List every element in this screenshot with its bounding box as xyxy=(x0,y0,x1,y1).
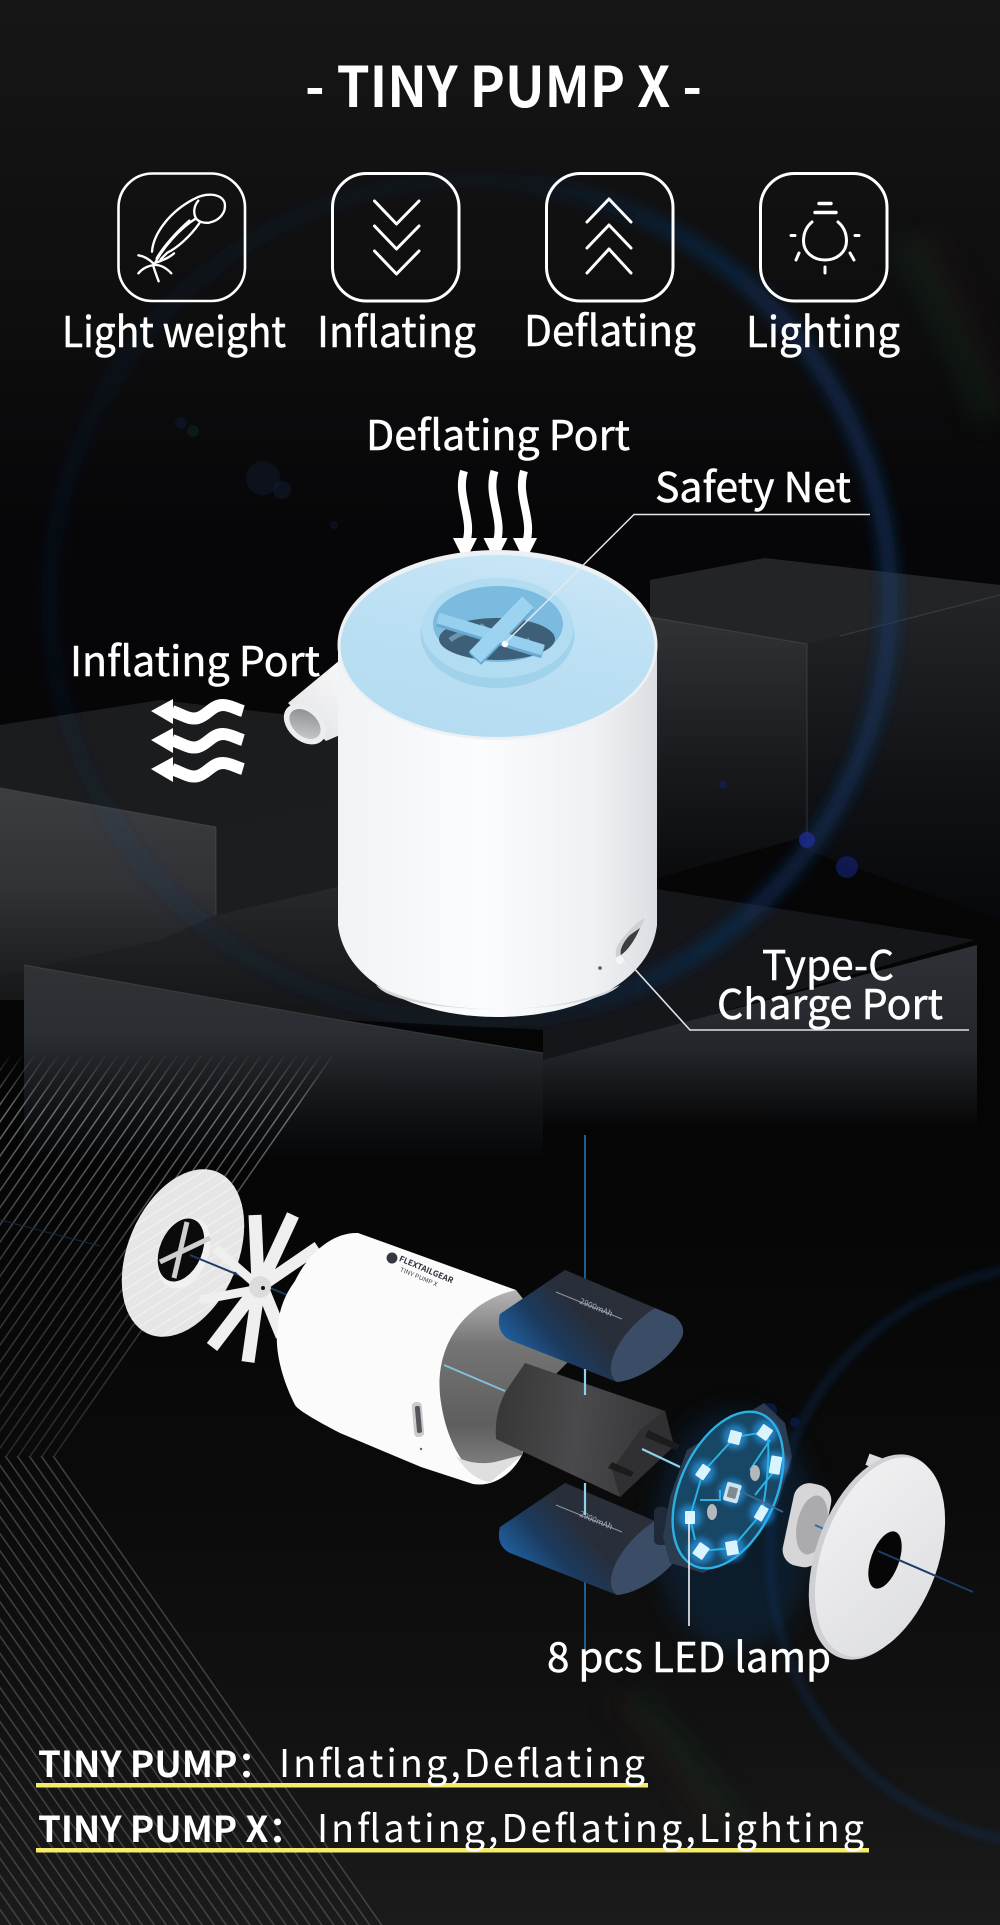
product: pump spout xyxy=(276,660,375,753)
exploded view axis lines xyxy=(0,1135,585,1680)
exploded: LED circuit board xyxy=(650,1395,806,1585)
exploded: housing logo xyxy=(383,1248,455,1294)
comparison line: tiny pump: TINY PUMP： xyxy=(38,1736,274,1788)
leader line: LED lamp xyxy=(688,1516,690,1626)
product: pump body xyxy=(338,550,658,1017)
label: type-c charge port: Charge Port xyxy=(717,971,943,1031)
icon labels: Inflating xyxy=(317,299,476,360)
label: 8 pcs LED lamp: 8 pcs LED lamp xyxy=(547,1624,831,1684)
label: inflating port: Inflating Port xyxy=(70,628,320,688)
label: type-c charge port xyxy=(717,932,943,1031)
label: deflating port: Deflating Port xyxy=(366,402,630,462)
exploded: usb connector xyxy=(654,1507,669,1545)
label: type-c charge port: Type-C xyxy=(762,932,894,992)
arrows: deflating port airflow xyxy=(453,471,537,562)
comparison line: tiny pump x xyxy=(36,1798,869,1853)
label: safety net: Safety Net xyxy=(655,454,851,514)
background: geometric blocks xyxy=(0,558,1000,1165)
product: usb-c port xyxy=(598,918,645,970)
icon labels: Light weight xyxy=(62,299,286,360)
exploded: axis in housing xyxy=(444,1365,505,1391)
icon labels xyxy=(62,298,900,360)
exploded: pump housing xyxy=(277,1233,570,1485)
exploded: fan xyxy=(200,1215,318,1362)
icon: light bulb, lighting xyxy=(760,174,887,301)
comparison line: tiny pump x: Inflating,Deflating,Lighting xyxy=(317,1798,864,1853)
exploded: battery bottom xyxy=(499,1483,683,1595)
chips on the board xyxy=(707,1465,760,1520)
exploded: battery top: 2900mAh xyxy=(578,1296,614,1319)
leader line: safety net xyxy=(505,514,870,643)
background: diagonal line patterns xyxy=(0,1055,389,1925)
exploded: rear cover disk xyxy=(783,1436,973,1678)
LED lamps: eight glowing squares xyxy=(685,1424,782,1560)
comparison line: tiny pump: Inflating,Deflating xyxy=(279,1733,645,1788)
exploded: axis through fan xyxy=(190,1255,292,1297)
exploded: front cover disk xyxy=(98,1151,268,1355)
exploded: housing usb slot xyxy=(411,1402,424,1450)
icon: chevrons up, deflating xyxy=(546,174,673,301)
icon labels: Deflating xyxy=(524,298,696,359)
exploded: battery bottom: 2900mAh xyxy=(578,1509,614,1532)
title: - TINY PUMP X - xyxy=(305,43,702,124)
exploded: axis segments xyxy=(585,1369,680,1515)
exploded: motor xyxy=(496,1363,680,1497)
icon labels: Lighting xyxy=(746,299,900,360)
comparison line: tiny pump xyxy=(36,1733,648,1788)
leader line: type-c port xyxy=(622,955,969,1030)
icon: feather, light weight xyxy=(118,174,245,301)
exploded: small gasket xyxy=(740,1480,834,1570)
exploded: housing logo: FLEXTAILGEAR xyxy=(397,1253,455,1286)
icon: chevrons down, inflating xyxy=(332,174,459,301)
comparison line: tiny pump x: TINY PUMP X： xyxy=(38,1801,305,1853)
exploded: housing logo: TINY PUMP X xyxy=(399,1265,440,1289)
product: fan collar and safety net xyxy=(420,578,574,688)
arrows: inflating port airflow xyxy=(151,699,243,782)
exploded: battery top xyxy=(499,1270,683,1382)
